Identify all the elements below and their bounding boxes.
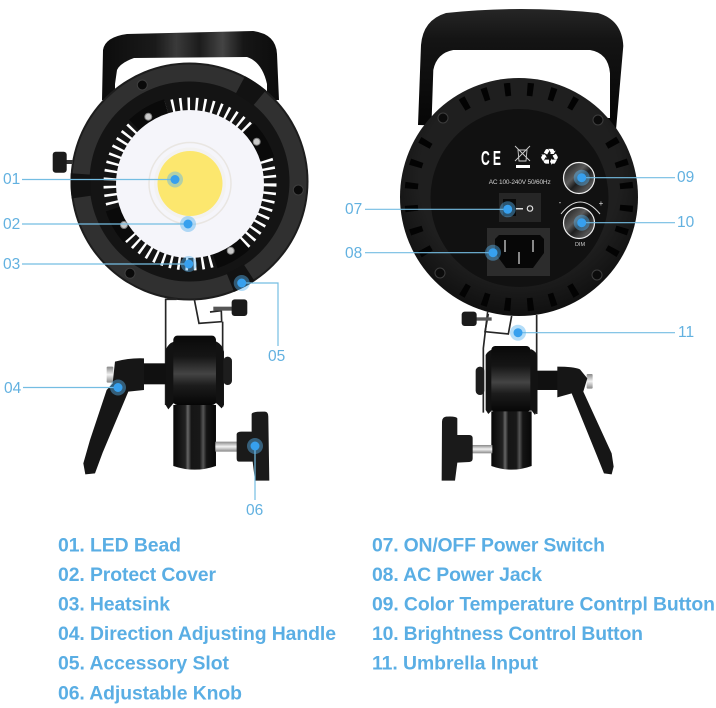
legend left column [58,534,336,704]
front lamp housing [39,31,340,332]
LED bead [149,142,231,224]
back pivot bump [476,367,484,395]
callout 02: 02 [3,216,20,233]
legend 03: 03. Heatsink [58,594,170,616]
brightness button: - [559,198,562,207]
adjustable knob thread [215,442,237,452]
handle bolt [107,367,113,383]
legend 05: 05. Accessory Slot [58,652,230,674]
callout 09: 09 [677,169,694,186]
silver cover screws [120,113,260,254]
back spigot post [491,411,532,470]
back knob thread [472,445,492,453]
brightness button: + [599,199,604,208]
callout 05: 05 [268,348,285,365]
back pivot cylinder [491,346,530,412]
brightness button: DIM [575,242,585,248]
front light unit [39,31,340,332]
direction adjusting handle [83,358,144,474]
legend 06: 06. Adjustable Knob [58,682,242,704]
back adjustable knob [442,417,473,481]
adjustable knob [237,412,269,481]
pivot bump [223,357,232,385]
back handle bolt [587,374,593,389]
callout 11: 11 [678,324,694,341]
power switch [499,193,541,222]
front stand [83,299,269,481]
back handle arm [537,371,559,390]
handle arm [143,363,166,384]
legend 08: 08. AC Power Jack [372,564,542,586]
pivot cylinder [173,336,216,405]
side knob [53,152,73,173]
callout 01: 01 [3,171,20,188]
back stand [442,312,614,481]
back side plates [486,349,537,415]
voltage text: AC 100-240V 50/60Hz [489,179,551,186]
back direction handle [557,367,614,474]
callout 07 [345,201,516,218]
CE mark: CE [481,148,504,170]
legend 04: 04. Direction Adjusting Handle [58,623,336,645]
back housing [400,78,638,316]
recycle icon: ♻ [539,145,560,171]
back handle [418,9,623,130]
back bracket [483,312,537,414]
AC power jack [487,228,550,276]
color temperature button [564,162,594,194]
callout 03: 03 [3,256,20,273]
callout 10: 10 [677,214,695,231]
side plates [166,342,224,409]
heatsink fins [76,70,304,298]
callout 05 [234,275,285,365]
legend 11: 11. Umbrella Input [372,652,539,674]
legend 09: 09. Color Temperature Contrpl Button [372,594,715,616]
callout 04: 04 [4,380,22,397]
callout 03 [3,256,197,273]
back control plate [430,109,608,287]
spigot post [173,405,216,470]
front handle [102,31,279,100]
ventilation slots [370,48,668,346]
legend 02: 02. Protect Cover [58,564,216,586]
callout 02 [3,216,196,233]
callout 07: 07 [345,201,362,218]
callout 04 [4,380,126,397]
legend 10: 10. Brightness Control Button [372,623,643,645]
slot tightening knob [213,299,247,316]
callout 06 [246,438,263,519]
WEEE icon [515,146,530,168]
legend 01: 01. LED Bead [58,534,181,556]
back screws [435,113,603,280]
callout 08 [345,245,501,262]
callout 11 [510,324,694,341]
legend 07: 07. ON/OFF Power Switch [372,534,605,556]
callout 08: 08 [345,245,362,262]
protect cover [116,110,264,258]
callout 01 [3,171,183,188]
callout 10 [574,214,695,231]
legend right column [372,534,715,674]
back slot knob [462,312,492,326]
callout 06: 06 [246,502,263,519]
housing screws [125,80,303,278]
callout 09 [574,169,694,186]
top bracket [166,299,223,407]
back light unit [370,9,668,346]
brightness button [559,198,604,248]
